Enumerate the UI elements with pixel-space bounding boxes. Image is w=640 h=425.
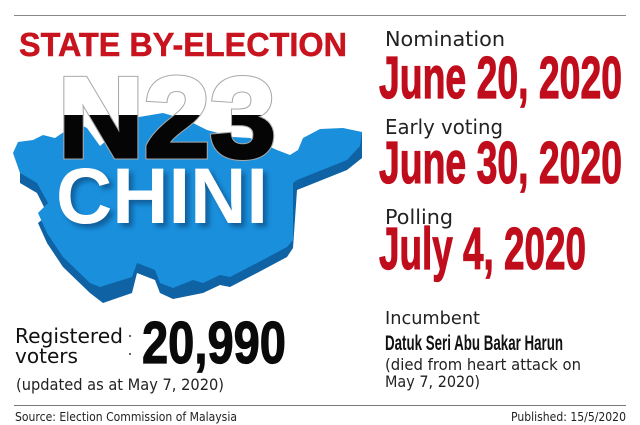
incumbent label: Incumbent [385,308,480,329]
nomination label: Nomination [385,27,505,51]
CHINI label: CHINI [56,151,268,240]
registered voters label [15,324,131,368]
early voting label: Early voting [385,115,503,139]
incumbent note: (died from heart attack on [385,355,581,374]
CHINI label: CHINI [60,155,272,244]
voter count: 20,990 [142,310,286,376]
source: Source: Election Commission of Malaysia [15,410,237,424]
N23 label: N23 [58,55,276,182]
N23 label: N23 [58,55,276,182]
published date: Published: 15/5/2020 [511,410,626,424]
map: Chini constituency [13,113,362,303]
voter update note: (updated as at May 7, 2020) [16,375,224,394]
N23 label: N23 [58,55,276,182]
registered voters label: Registered [15,324,123,348]
incumbent note [385,355,581,391]
N23 label: N23 [58,55,276,182]
incumbent note: May 7, 2020) [385,372,480,391]
N23 label [63,74,274,161]
polling label: Polling [385,205,453,229]
title: STATE BY-ELECTION [19,26,347,63]
registered voters label: voters [15,344,78,368]
